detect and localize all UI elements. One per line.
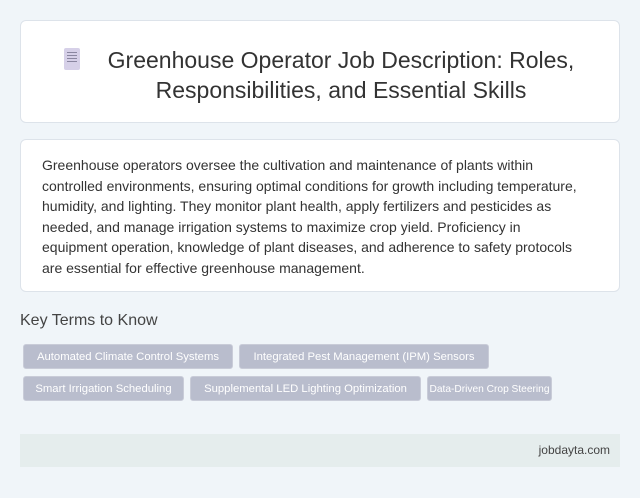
tags: Integrated Pest Management (IPM) Sensors (253, 351, 475, 363)
footer (20, 434, 620, 467)
tags: Supplemental LED Lighting Optimization (204, 383, 407, 395)
icon: document (64, 48, 80, 70)
tags: Smart Irrigation Scheduling (35, 383, 172, 395)
title card (20, 20, 620, 123)
key terms heading: Key Terms to Know (20, 312, 158, 329)
tags: Data-Driven Crop Steering (429, 384, 550, 395)
tags: Automated Climate Control Systems (37, 351, 219, 363)
description card (20, 139, 620, 292)
title: Greenhouse Operator Job Description: Roles, Responsibilities, and Essential Skills (108, 47, 574, 103)
description text: Greenhouse operators oversee the cultivation and maintenance of plants within controlled environments, ensuring optimal conditions for growth including temperature, humidity, and lighting. They monitor plant health, apply fertilizers and pesticides as needed, and manage irrigation systems to maximize crop yield. Proficiency in equipment operation, knowledge of plant diseases, and adherence to safety protocols are essential for effective greenhouse management. (42, 157, 577, 276)
footer source: jobdayta.com (539, 443, 610, 457)
